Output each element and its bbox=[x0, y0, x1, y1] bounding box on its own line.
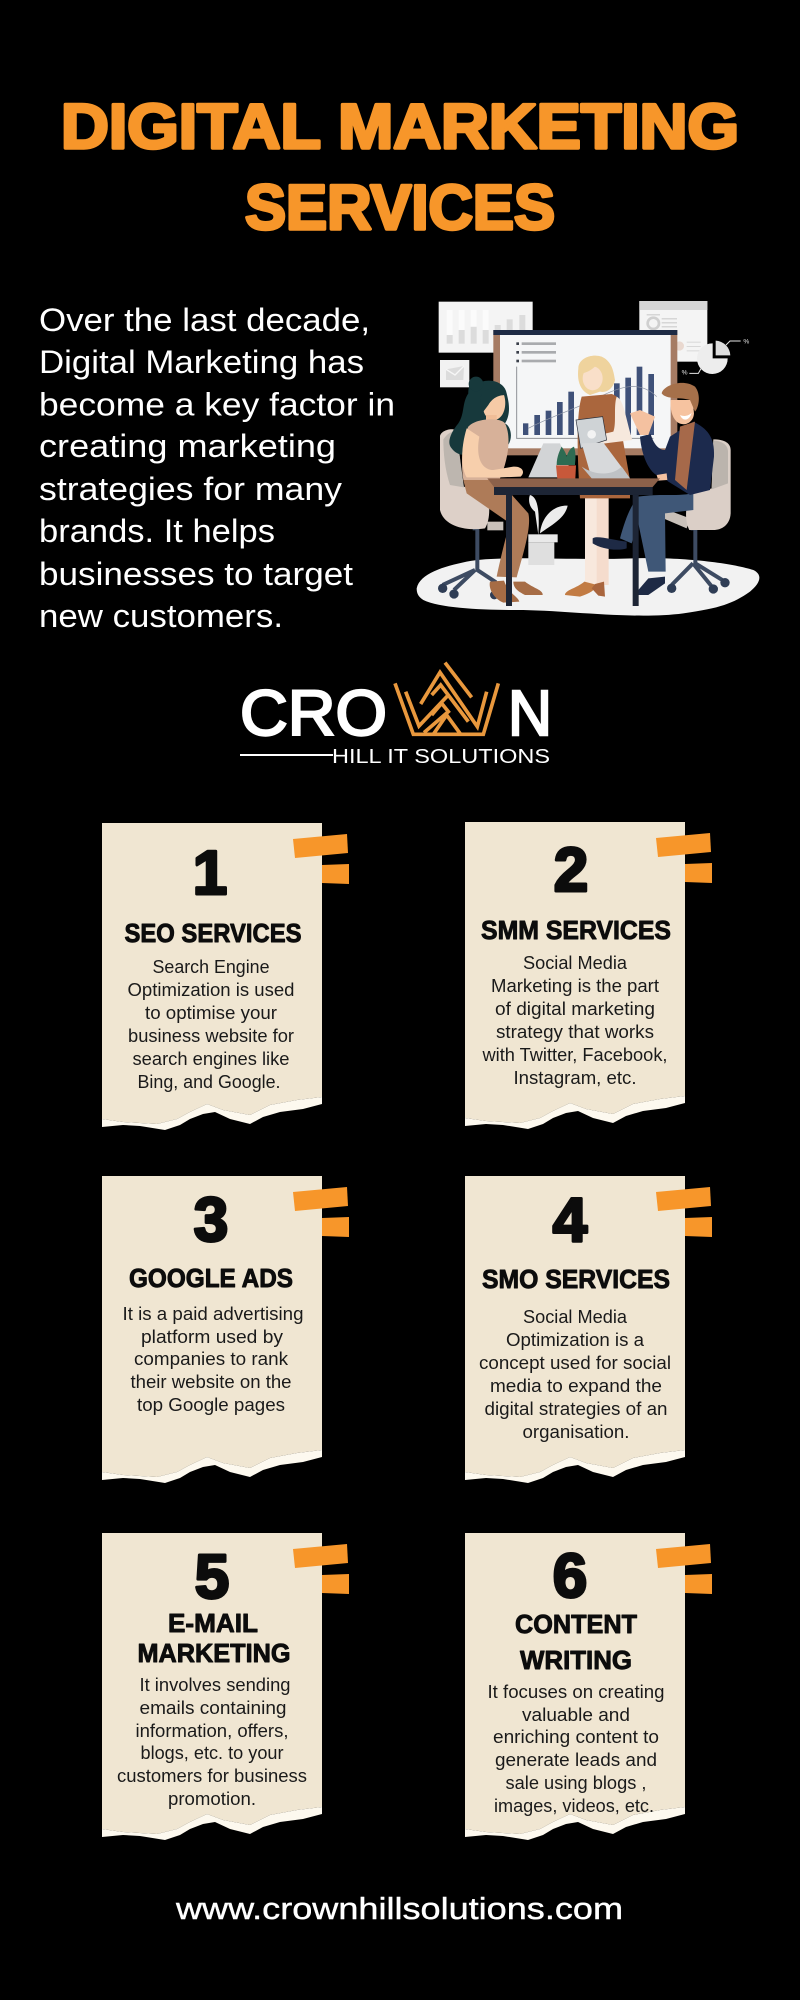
whiteboard with chart bbox=[493, 330, 677, 455]
panel: card 6 Content writing: WRITING bbox=[520, 1645, 632, 1675]
panel: card 5 E-mail marketing: MARKETING bbox=[138, 1638, 290, 1668]
panel: card 5 E-mail marketing: customers for business bbox=[117, 1766, 307, 1786]
panel: card 1 SEO services: business website for bbox=[128, 1026, 294, 1046]
panel: card 5 E-mail marketing: promotion. bbox=[168, 1789, 256, 1809]
panel: card 5 E-mail marketing: blogs, etc. to your bbox=[140, 1743, 284, 1763]
panel: card 1 SEO services: Optimization is used bbox=[128, 980, 294, 1000]
panel: card 2 SMM services bbox=[465, 822, 712, 1129]
panel: card 2 SMM services: SMM SERVICES bbox=[481, 915, 671, 945]
panel: card 2 SMM services: Marketing is the part bbox=[491, 976, 659, 996]
title: DIGITAL MARKETING bbox=[61, 92, 739, 162]
panel: card 3 Google Ads: top Google pages bbox=[137, 1395, 285, 1415]
intro text block: Digital Marketing has bbox=[39, 344, 364, 380]
icon: crown bbox=[395, 663, 498, 734]
illustration: team meeting around a table bbox=[417, 301, 759, 616]
panel: card 3 Google Ads: their website on the bbox=[130, 1372, 292, 1392]
panel: card 1 SEO services: search engines like bbox=[132, 1049, 290, 1069]
intro text block: become a key factor in bbox=[39, 386, 395, 422]
intro text block: new customers. bbox=[39, 598, 283, 634]
icon: envelope panel bbox=[440, 360, 469, 387]
panel: card 5 E-mail marketing: 5 bbox=[195, 1543, 229, 1612]
panel: card 3 Google Ads: It is a paid advertising bbox=[122, 1304, 304, 1324]
panel: card 6 Content writing: valuable and bbox=[522, 1705, 630, 1725]
panel: card 6 Content writing: generate leads and bbox=[495, 1750, 657, 1770]
panel: card 6 Content writing: CONTENT bbox=[515, 1609, 637, 1639]
panel: card 1 SEO services bbox=[102, 823, 349, 1130]
panel: card 2 SMM services: with Twitter, Facebook, bbox=[481, 1045, 668, 1065]
intro text block: strategies for many bbox=[39, 471, 342, 507]
man in navy jacket bbox=[593, 383, 714, 595]
panel: card 2 SMM services: Instagram, etc. bbox=[514, 1068, 636, 1088]
logo: Crown Hill IT Solutions: HILL IT SOLUTIONS bbox=[332, 746, 550, 768]
panel: card 3 Google Ads: platform used by bbox=[141, 1327, 283, 1347]
icon: pie chart: % bbox=[682, 370, 688, 377]
icon: background bar chart panel bbox=[439, 302, 533, 353]
panel: card 6 Content writing: 6 bbox=[553, 1542, 587, 1611]
panel: card 3 Google Ads bbox=[102, 1176, 349, 1483]
panel: card 5 E-mail marketing: It involves sending bbox=[140, 1675, 290, 1695]
panel: card 6 Content writing bbox=[465, 1533, 712, 1840]
icon: dashboard panel bbox=[639, 301, 707, 362]
title: SERVICES bbox=[245, 173, 555, 243]
panel: card 2 SMM services: Social Media bbox=[523, 953, 628, 973]
panel: card 4 SMO services: media to expand the bbox=[490, 1376, 662, 1396]
background potted plant bbox=[528, 495, 568, 565]
intro text block: brands. It helps bbox=[39, 513, 275, 549]
panel: card 1 SEO services: to optimise your bbox=[145, 1003, 277, 1023]
panel: card 6 Content writing: images, videos, etc. bbox=[494, 1796, 654, 1816]
logo: Crown Hill IT Solutions bbox=[240, 663, 552, 768]
logo: Crown Hill IT Solutions: CRO bbox=[240, 677, 387, 749]
seated woman with laptop bbox=[449, 377, 543, 603]
panel: card 2 SMM services: of digital marketing bbox=[495, 999, 655, 1019]
panel: card 5 E-mail marketing: E-MAIL bbox=[168, 1608, 258, 1638]
panel: card 2 SMM services: 2 bbox=[554, 836, 588, 905]
potted plant on table bbox=[556, 447, 576, 479]
panel: card 4 SMO services: SMO SERVICES bbox=[482, 1264, 670, 1294]
panel: card 3 Google Ads: GOOGLE ADS bbox=[129, 1263, 293, 1293]
panel: card 6 Content writing: It focuses on creating bbox=[488, 1682, 664, 1702]
panel: card 4 SMO services: Social Media bbox=[523, 1307, 628, 1327]
panel: card 1 SEO services: Bing, and Google. bbox=[138, 1072, 280, 1092]
panel: card 1 SEO services: 1 bbox=[193, 839, 227, 908]
panel: card 3 Google Ads: 3 bbox=[194, 1186, 228, 1255]
panel: card 1 SEO services: Search Engine bbox=[152, 957, 270, 977]
intro text block: Over the last decade, bbox=[39, 302, 370, 338]
left office chair bbox=[438, 429, 503, 599]
panel: card 4 SMO services: concept used for social bbox=[479, 1353, 671, 1373]
panel: card 5 E-mail marketing: information, offers, bbox=[136, 1721, 288, 1741]
footer website URL: www.crownhillsolutions.com bbox=[175, 1891, 623, 1926]
panel: card 1 SEO services: SEO SERVICES bbox=[124, 918, 302, 948]
right office chair bbox=[663, 439, 731, 594]
title bbox=[61, 92, 739, 243]
intro text block: businesses to target bbox=[39, 556, 353, 592]
panel: card 6 Content writing: enriching content to bbox=[493, 1727, 659, 1747]
intro text block: creating marketing bbox=[39, 428, 336, 464]
panel: card 5 E-mail marketing bbox=[102, 1533, 349, 1840]
panel: card 2 SMM services: strategy that works bbox=[496, 1022, 654, 1042]
standing woman with tablet bbox=[565, 356, 632, 597]
panel: card 4 SMO services: digital strategies of an bbox=[484, 1399, 668, 1419]
laptops bbox=[528, 443, 630, 478]
panel: card 4 SMO services: 4 bbox=[553, 1186, 588, 1255]
panel: card 6 Content writing: sale using blogs , bbox=[506, 1773, 646, 1793]
intro text block bbox=[39, 302, 395, 634]
logo: Crown Hill IT Solutions: N bbox=[508, 677, 552, 749]
meeting table bbox=[487, 478, 660, 606]
panel: card 5 E-mail marketing: emails containing bbox=[140, 1698, 286, 1718]
icon: pie chart: % bbox=[743, 338, 749, 345]
panel: card 4 SMO services: organisation. bbox=[522, 1422, 630, 1442]
panel: card 4 SMO services: Optimization is a bbox=[506, 1330, 645, 1350]
icon: pie chart bbox=[682, 338, 749, 377]
panel: card 3 Google Ads: companies to rank bbox=[134, 1349, 289, 1369]
panel: card 4 SMO services bbox=[465, 1176, 712, 1483]
